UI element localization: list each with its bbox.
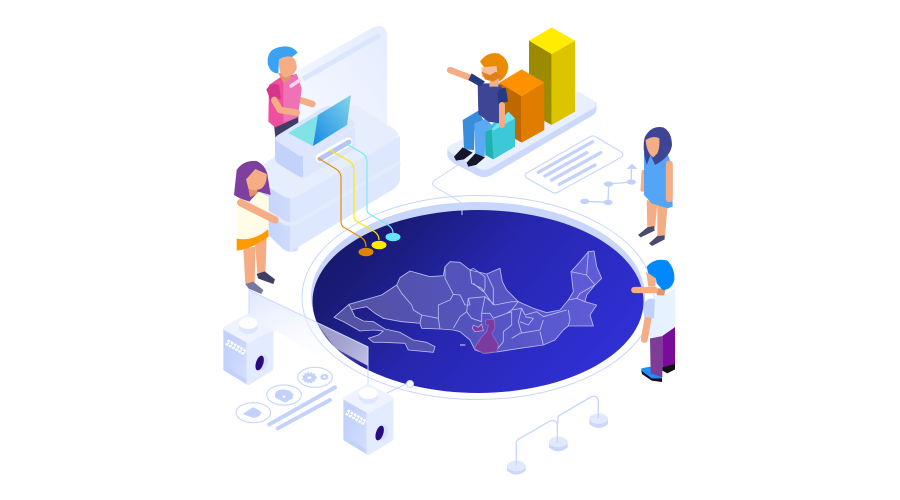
front shoe <box>649 235 665 246</box>
back shoe <box>662 364 675 373</box>
extended arm <box>450 70 472 78</box>
panel stripe <box>303 35 380 79</box>
yellow wire <box>330 150 379 240</box>
right face <box>368 399 391 453</box>
connector node <box>406 380 414 388</box>
card outline <box>525 136 623 193</box>
face <box>646 272 656 287</box>
small highlighted area <box>472 324 483 332</box>
hair <box>647 260 674 290</box>
laptop stand box <box>275 95 355 178</box>
box 2 <box>345 385 391 453</box>
gears icon <box>298 367 332 387</box>
front leg <box>243 247 255 284</box>
back leg <box>647 200 657 228</box>
sleeve <box>643 299 655 318</box>
plane edges <box>249 283 368 385</box>
box 2 connector <box>387 384 406 393</box>
screen <box>313 95 351 146</box>
bar chart on platform <box>447 27 597 177</box>
back leg <box>255 237 267 275</box>
right sleeve <box>497 88 508 103</box>
cap <box>359 393 378 404</box>
front shoe <box>245 282 263 294</box>
front leg <box>474 118 493 157</box>
seat <box>485 115 515 159</box>
highlighted state <box>474 319 498 353</box>
far arm <box>300 100 312 104</box>
cap <box>239 323 258 334</box>
back shoe <box>454 147 473 161</box>
front shoe <box>641 367 662 381</box>
hair <box>268 46 298 73</box>
person: seated man <box>450 53 515 167</box>
left face <box>345 399 368 453</box>
shirt <box>268 74 302 127</box>
hair <box>480 53 508 82</box>
stack right face <box>290 136 400 252</box>
extended arm <box>634 280 655 299</box>
node 2 <box>549 437 568 451</box>
left sleeve <box>468 73 485 87</box>
label pattern <box>347 412 365 423</box>
map of Mexico <box>334 251 602 353</box>
legs <box>274 115 298 140</box>
mainland <box>349 251 602 353</box>
front shoe <box>467 153 485 167</box>
back glass panel <box>298 26 387 140</box>
left face <box>225 329 248 383</box>
front leg <box>657 205 667 237</box>
icons row <box>236 367 335 428</box>
back leg <box>662 327 675 368</box>
base side <box>447 102 597 177</box>
back shoe <box>638 226 655 237</box>
Baja California peninsula <box>334 304 435 352</box>
link from platform to disc <box>432 165 462 215</box>
state borders <box>397 252 595 352</box>
shield icon <box>236 403 271 423</box>
orange node <box>358 248 374 256</box>
yellow node <box>372 241 386 249</box>
card lines <box>538 142 601 184</box>
disc light rim <box>311 202 645 390</box>
plane fill <box>249 290 368 385</box>
face <box>646 137 659 157</box>
back arm <box>642 172 643 190</box>
skirt hem <box>237 229 269 251</box>
bottom connected nodes <box>507 396 608 475</box>
neck <box>248 187 257 197</box>
top face <box>225 315 271 341</box>
dark blue disc <box>312 210 644 393</box>
person: blue hair boy <box>634 260 676 382</box>
shirt <box>645 287 676 338</box>
label pattern <box>227 342 245 353</box>
box right face <box>303 127 355 178</box>
back leg <box>463 111 485 150</box>
front leg <box>650 336 662 377</box>
keyboard <box>288 115 318 146</box>
orange bar <box>499 69 544 143</box>
connector lines <box>516 396 598 460</box>
face <box>279 56 297 77</box>
arm <box>241 203 275 220</box>
cyan wire <box>345 143 393 233</box>
hair <box>234 161 271 202</box>
dress <box>644 153 673 208</box>
near arm <box>274 100 297 113</box>
wires <box>318 143 393 247</box>
torso <box>478 83 505 123</box>
base top <box>448 91 596 170</box>
right face <box>248 329 271 383</box>
node 1 <box>507 461 526 475</box>
box 1 <box>225 315 271 383</box>
outer disc outline <box>302 196 654 400</box>
person: purple hair <box>234 161 275 294</box>
yellow bar <box>529 27 575 125</box>
small island <box>460 343 465 346</box>
dress <box>237 192 269 240</box>
near arm <box>659 164 680 199</box>
document card <box>525 136 623 193</box>
server stack platform <box>251 105 400 252</box>
face <box>246 169 267 190</box>
long bars <box>269 387 335 428</box>
box top face <box>276 106 354 156</box>
plane over disc <box>317 323 368 366</box>
person: pink shirt <box>266 46 312 140</box>
stack top face <box>253 105 398 198</box>
cyan node <box>386 233 400 241</box>
box left face <box>275 137 308 178</box>
network diagram <box>580 164 637 205</box>
port slot <box>320 142 348 158</box>
network nodes <box>580 179 636 205</box>
person: blue dress <box>638 127 673 246</box>
orange wire <box>318 158 366 247</box>
beard <box>481 72 502 82</box>
node 3 <box>589 413 608 428</box>
port <box>256 354 270 372</box>
hair <box>644 127 672 165</box>
name badge <box>291 81 299 86</box>
port <box>376 424 390 442</box>
back shoe <box>257 271 275 284</box>
top face <box>345 385 391 411</box>
face <box>482 66 497 80</box>
neck <box>654 288 666 295</box>
neck <box>489 77 499 87</box>
stack left face <box>251 165 300 252</box>
right arm <box>493 105 511 125</box>
lower arm <box>644 317 648 339</box>
network lines <box>585 167 631 202</box>
neck <box>278 70 291 83</box>
floating glass plane <box>249 283 368 385</box>
lock icon <box>267 385 301 405</box>
stack seam <box>254 162 400 224</box>
arrow head <box>627 164 637 169</box>
sleeve <box>266 84 281 102</box>
